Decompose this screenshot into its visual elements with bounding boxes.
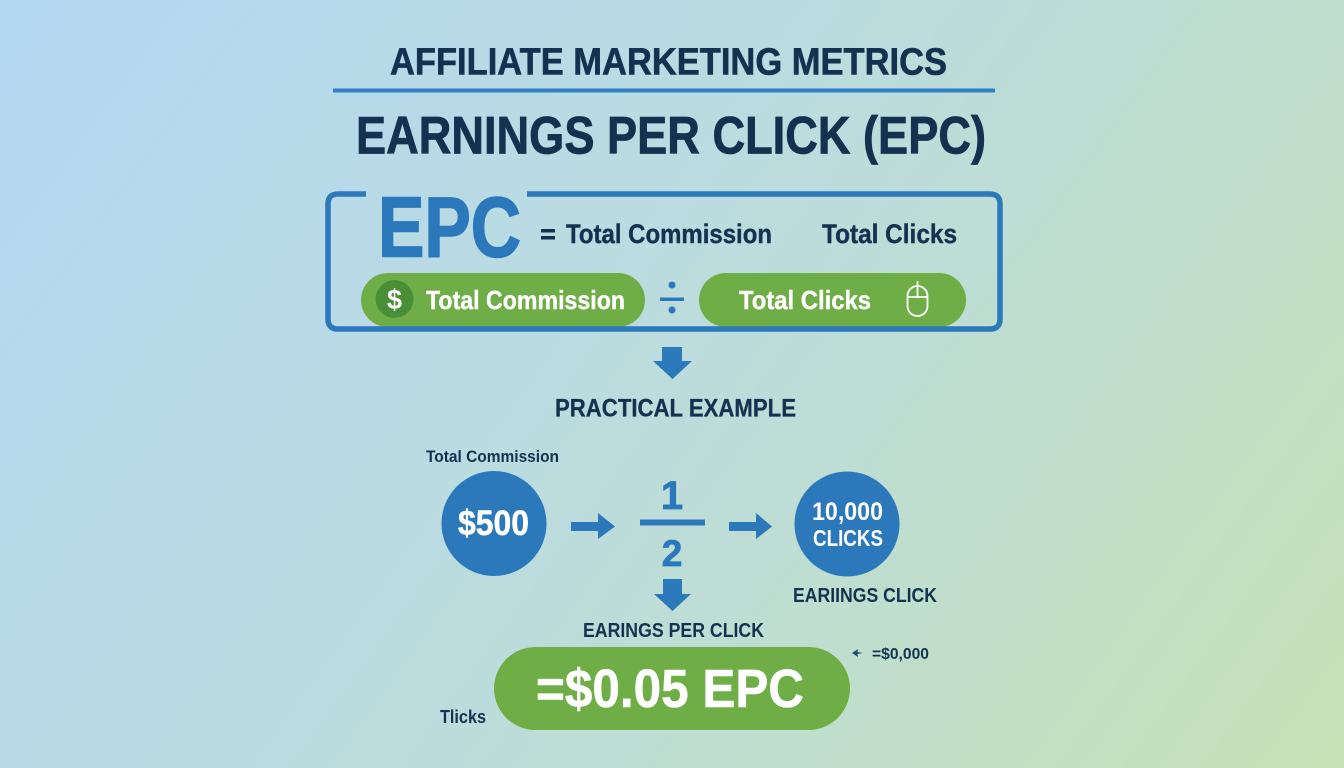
pill: result <box>494 647 850 730</box>
formula denominator text: Total Clicks <box>822 219 957 249</box>
equals sign <box>541 229 555 240</box>
icon: dollar coin <box>376 280 414 318</box>
pill: total clicks: Total Clicks <box>739 285 871 315</box>
label: total commission: Total Commission <box>426 447 559 466</box>
circle: 10,000 clicks: CLICKS <box>813 525 883 551</box>
pill: total commission <box>361 273 645 327</box>
fraction: 1 <box>661 474 683 518</box>
label: tlicks: Tlicks <box>440 707 486 727</box>
note: =$0,000: =$0,000 <box>872 646 929 663</box>
circle: $500: $500 <box>458 504 529 543</box>
pill: total clicks <box>699 273 966 327</box>
icon: mouse <box>908 281 928 316</box>
pill: result: =$0.05 EPC <box>536 659 804 719</box>
panel: formula <box>328 180 1000 329</box>
icon: divide sign <box>660 282 684 314</box>
arrow: right one <box>571 513 615 539</box>
fraction <box>640 474 705 574</box>
formula numerator text: Total Commission <box>566 219 772 249</box>
pill: total commission: Total Commission <box>426 285 625 315</box>
circle: $500 <box>442 471 546 576</box>
EPC label: EPC <box>378 180 521 276</box>
heading: EARNINGS PER CLICK (EPC) <box>356 106 986 166</box>
arrow: down to example <box>653 347 692 379</box>
frame with gap behind EPC <box>328 194 1000 329</box>
title: AFFILIATE MARKETING METRICS <box>390 42 947 84</box>
circle: 10,000 clicks <box>794 472 900 576</box>
label: earnings per click: EARINGS PER CLICK <box>583 620 764 642</box>
label: earnings click: EARIINGS CLICK <box>793 585 937 607</box>
arrow: right two <box>729 513 772 539</box>
icon: dollar coin: $ <box>387 284 402 315</box>
arrow: down to result <box>654 579 691 611</box>
heading: practical example: PRACTICAL EXAMPLE <box>555 394 796 422</box>
fraction: 2 <box>662 533 682 574</box>
circle: 10,000 clicks: 10,000 <box>812 498 883 526</box>
